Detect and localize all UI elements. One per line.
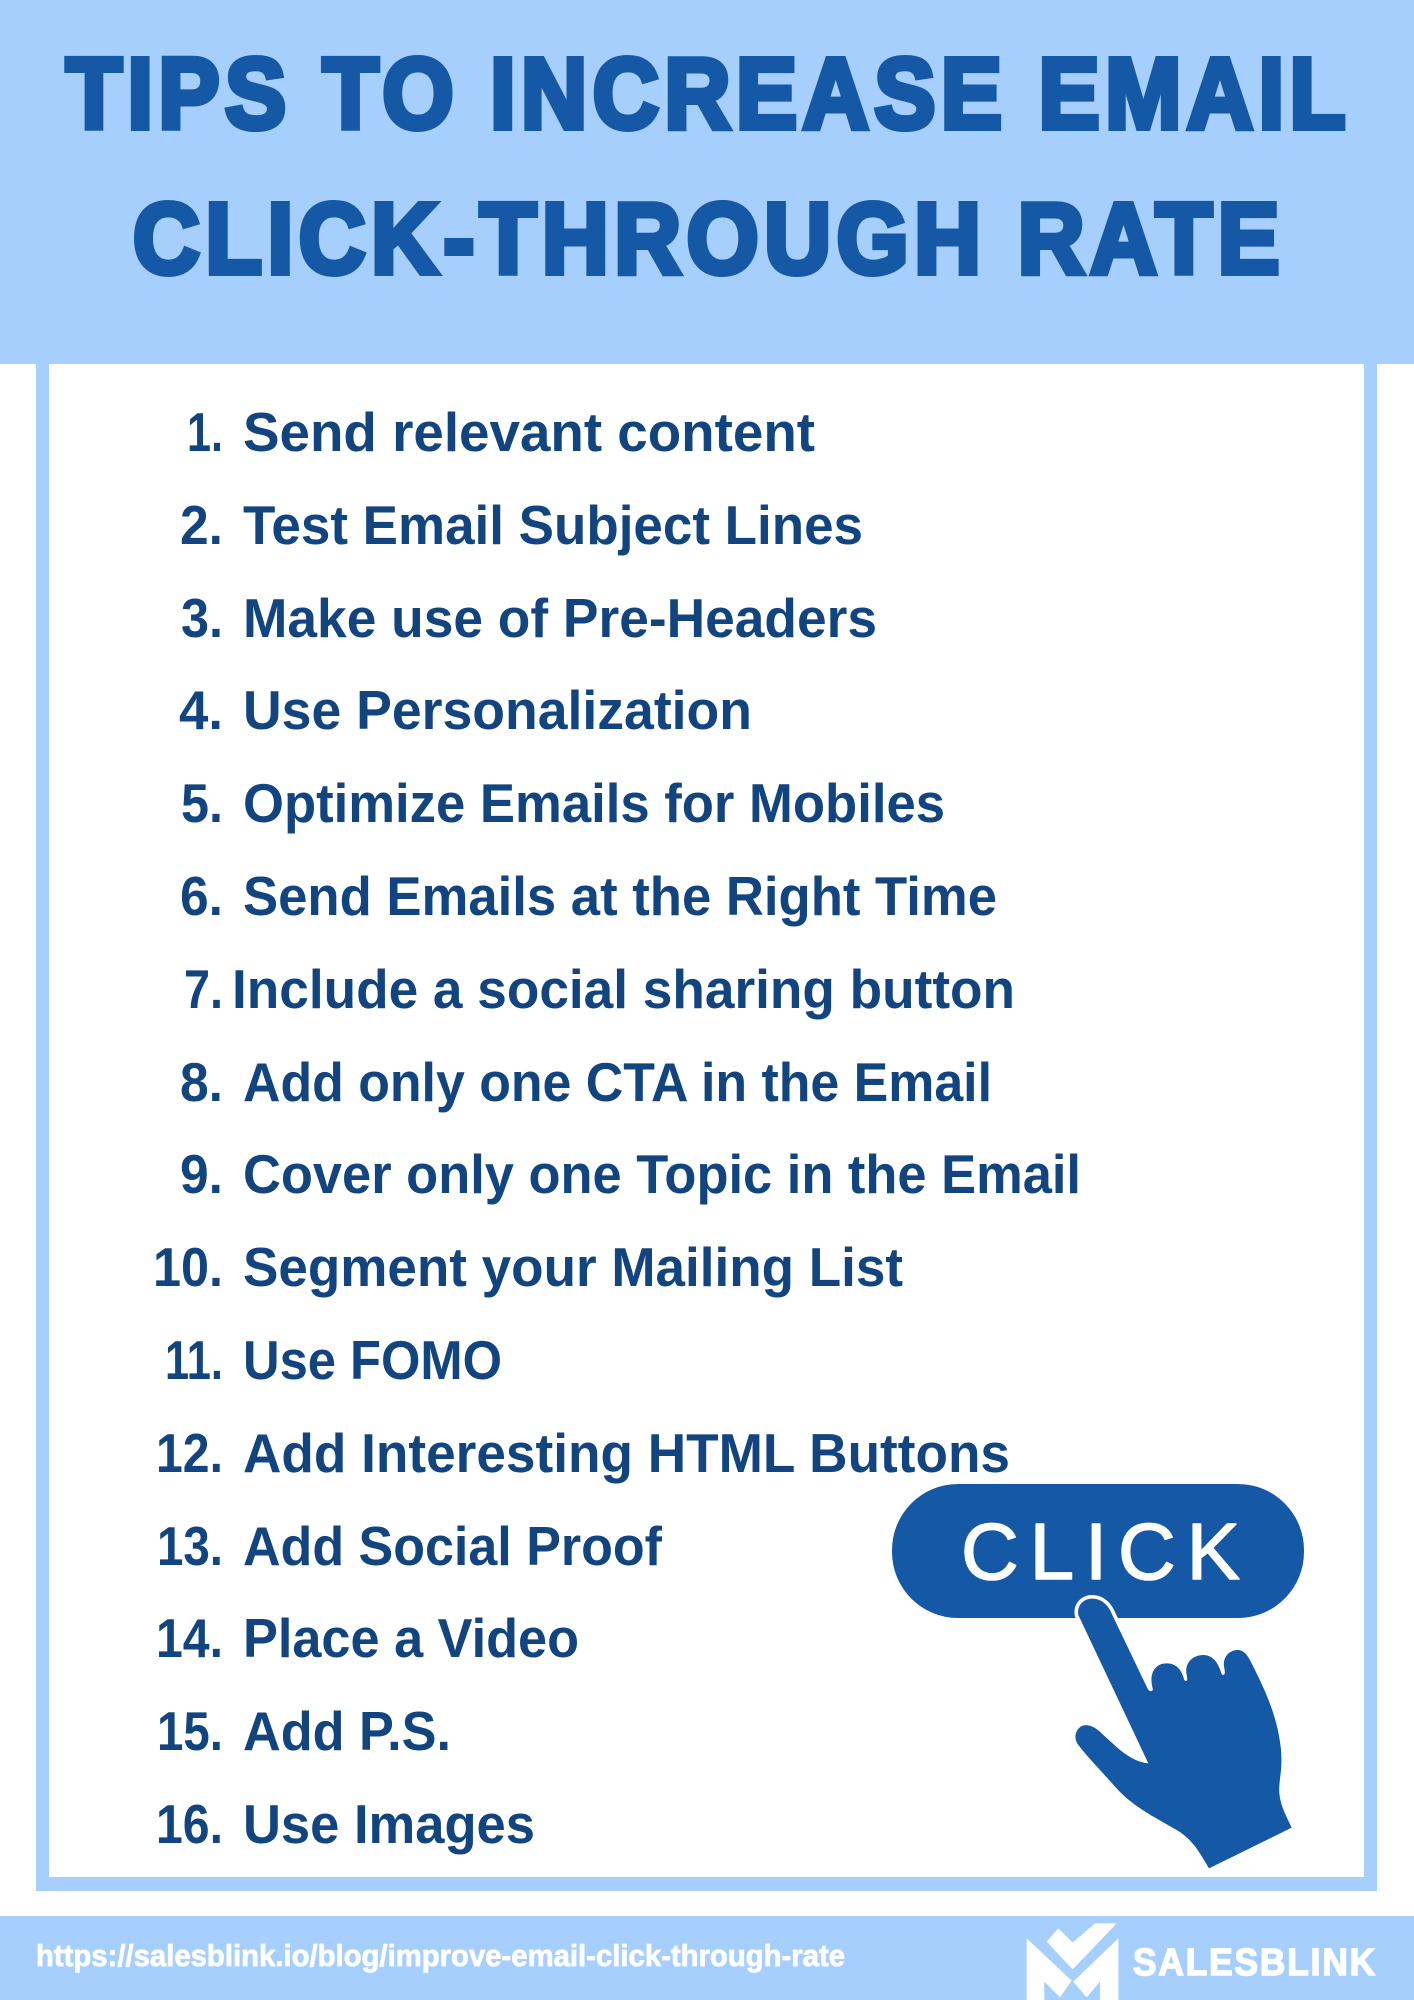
click button (892, 1484, 1304, 1618)
icon: pointing hand (1075, 1599, 1292, 1868)
list frame (36, 340, 1377, 1891)
tips list: 15. (157, 1700, 223, 1762)
tips list: Send Emails at the Right Time (243, 865, 997, 927)
tips list: 4. (179, 679, 223, 741)
brand name: SALESBLINK (1133, 1942, 1377, 1984)
title: CLICK-THROUGH RATE (133, 183, 1285, 295)
tips list (153, 401, 1081, 1855)
tips list: Optimize Emails for Mobiles (243, 772, 945, 834)
icon: salesblink logo (1027, 1923, 1118, 2000)
tips list: 7. (184, 958, 223, 1020)
tips list: Use Personalization (243, 679, 752, 741)
tips list: 14. (156, 1607, 223, 1669)
title (66, 38, 1351, 295)
tips list: Use FOMO (243, 1329, 502, 1391)
tips list: 13. (157, 1515, 223, 1577)
tips list: 3. (181, 587, 223, 649)
tips list: 12. (156, 1422, 223, 1484)
tips list: Cover only one Topic in the Email (243, 1143, 1081, 1205)
tips list: 10. (153, 1236, 223, 1298)
tips list: Send relevant content (243, 401, 815, 463)
source url: https://salesblink.io/blog/improve-email-click-through-rate (36, 1938, 845, 1973)
tips list: Add only one CTA in the Email (243, 1051, 992, 1113)
tips list: Include a social sharing button (232, 958, 1015, 1020)
tips list: Test Email Subject Lines (243, 494, 863, 556)
tips list: 5. (181, 772, 223, 834)
tips list: Add Social Proof (243, 1515, 663, 1577)
tips list: Make use of Pre-Headers (243, 587, 877, 649)
tips list: Add P.S. (243, 1700, 451, 1762)
tips list: Add Interesting HTML Buttons (243, 1422, 1010, 1484)
tips list: 8. (180, 1051, 223, 1113)
tips list: 2. (180, 494, 223, 556)
tips list: 6. (180, 865, 223, 927)
tips list: 11. (165, 1329, 223, 1391)
tips list: 1. (187, 401, 223, 463)
tips list: Segment your Mailing List (243, 1236, 903, 1298)
tips list: Use Images (243, 1793, 535, 1855)
click button: CLICK (961, 1507, 1240, 1596)
tips list: Place a Video (243, 1607, 579, 1669)
footer panel (0, 1916, 1414, 2000)
tips list: 16. (156, 1793, 223, 1855)
tips list: 9. (180, 1143, 223, 1205)
header panel (0, 0, 1414, 364)
